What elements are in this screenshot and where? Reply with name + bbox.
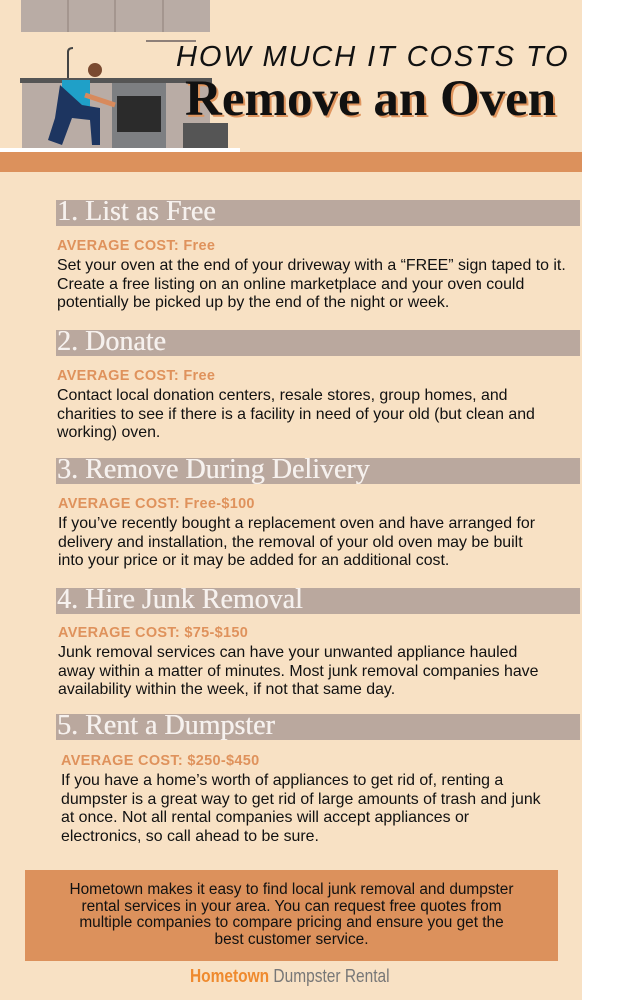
cost 5: AVERAGE COST: $250-$450 <box>61 753 259 769</box>
body 4: away within a matter of minutes. Most junk removal companies have <box>58 663 538 680</box>
title <box>176 41 570 127</box>
body 4: Junk removal services can have your unwanted appliance hauled <box>58 644 517 661</box>
panel: 5 rent a dumpster <box>56 710 580 845</box>
callout box: Hometown makes it easy to find local junk removal and dumpster <box>70 881 513 898</box>
body 4 <box>58 644 538 698</box>
title: Remove an Oven <box>185 71 556 127</box>
body 1 <box>57 257 566 311</box>
body 5: dumpster is a great way to get rid of large amounts of trash and junk <box>61 791 541 808</box>
orange band <box>0 152 582 172</box>
cost 1: AVERAGE COST: Free <box>57 238 215 254</box>
heading 1: 1. List as Free <box>57 196 216 227</box>
title: HOW MUCH IT COSTS TO <box>176 41 570 73</box>
cost 4: AVERAGE COST: $75-$150 <box>58 625 248 641</box>
panel: 2 donate <box>56 326 580 441</box>
callout box: rental services in your area. You can request free quotes from <box>81 898 502 914</box>
body 1: Create a free listing on an online marketplace and your oven could <box>57 276 524 293</box>
body 3: If you’ve recently bought a replacement oven and have arranged for <box>58 515 535 532</box>
body 2: Contact local donation centers, resale stores, group homes, and <box>57 387 508 404</box>
cost 3: AVERAGE COST: Free-$100 <box>58 496 255 512</box>
callout box <box>25 870 558 961</box>
body 1: potentially be picked up by the end of the night or week. <box>57 294 449 311</box>
body 5 <box>61 772 541 845</box>
heading 4 <box>56 588 580 614</box>
body 5: If you have a home’s worth of appliances to get rid of, renting a <box>61 772 503 789</box>
heading 5 <box>56 714 580 740</box>
body 4: availability within the week, if not that same day. <box>58 681 395 698</box>
heading 2: 2. Donate <box>57 326 166 357</box>
logo: Hometown Dumpster Rental <box>190 966 390 986</box>
body 5: electronics, so call ahead to be sure. <box>61 828 319 845</box>
heading 4: 4. Hire Junk Removal <box>57 584 303 615</box>
heading 1 <box>56 200 580 226</box>
body 2: charities to see if there is a facility in need of your old (but clean and <box>57 406 535 423</box>
body 3: into your price or it may be added for an additional cost. <box>58 552 449 569</box>
body 1: Set your oven at the end of your driveway with a “FREE” sign taped to it. <box>57 257 566 274</box>
body 3 <box>58 515 535 569</box>
body 3: delivery and installation, the removal of your old oven may be built <box>58 534 523 551</box>
callout box: multiple companies to compare pricing and ensure you get the <box>79 914 504 931</box>
body 5: at once. Not all rental companies will accept appliances or <box>61 809 469 826</box>
illustration: kitchen with technician <box>0 0 240 152</box>
heading 2 <box>56 330 580 356</box>
panel: 1 list as free <box>56 196 580 311</box>
heading 3 <box>56 458 580 484</box>
body 2: working) oven. <box>57 424 160 441</box>
heading 3: 3. Remove During Delivery <box>57 454 370 485</box>
callout box: best customer service. <box>215 930 368 948</box>
cost 2: AVERAGE COST: Free <box>57 368 215 384</box>
heading 5: 5. Rent a Dumpster <box>57 710 275 741</box>
panel: 3 remove during delivery <box>56 454 580 569</box>
panel: 4 hire junk removal <box>56 584 580 698</box>
body 2 <box>57 387 535 441</box>
